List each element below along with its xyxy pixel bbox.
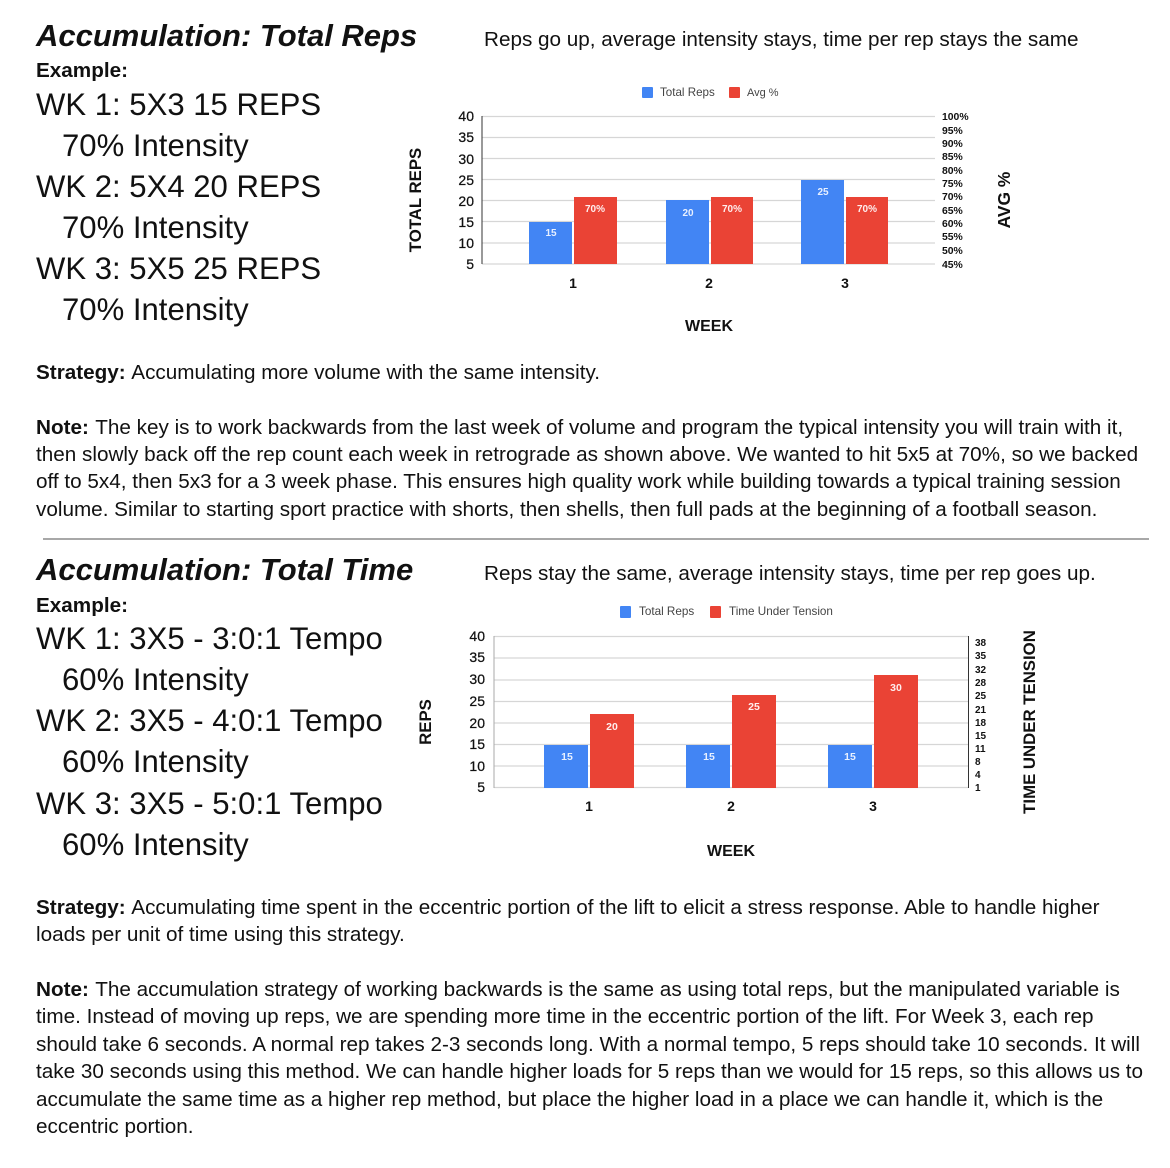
example program list: 70% Intensity — [62, 210, 249, 245]
left axis labels: 25 — [458, 172, 474, 188]
bars: 15 — [703, 751, 715, 763]
bar chart: total reps and time under tension — [416, 605, 1039, 860]
bars — [544, 675, 918, 788]
divider — [43, 538, 1149, 540]
right axis labels: 65% — [942, 206, 963, 217]
example program list: 70% Intensity — [62, 292, 249, 327]
right axis labels — [942, 112, 969, 271]
legend — [620, 605, 833, 618]
x axis labels: 1 — [585, 798, 593, 814]
note text: then slowly back off the rep count each week in retrograde as shown above. We wanted to hit 5x5 at 70%, so we backed — [36, 443, 1138, 466]
note text: should take 6 seconds. A normal rep takes 2-3 seconds long. With a normal tempo, 5 reps should take 10 seconds. It will — [36, 1033, 1140, 1056]
note text: off to 5x4, then 5x3 for a 3 week phase. This ensures high quality work while building towards a typical training session — [36, 470, 1121, 493]
title: Accumulation: Total Time — [36, 552, 413, 587]
right axis labels — [975, 638, 987, 794]
note text: accumulate the same time as a higher rep method, but place the higher load in a place we can handle it, which is the — [36, 1088, 1103, 1111]
example program list: WK 3: 3X5 - 5:0:1 Tempo — [36, 786, 383, 821]
left axis labels: 5 — [466, 256, 474, 272]
x axis labels: WEEK — [685, 318, 733, 335]
axis title: avg percent: AVG % — [994, 172, 1014, 228]
right axis labels: 4 — [975, 770, 981, 781]
right axis labels: 75% — [942, 179, 963, 190]
x axis labels: 1 — [569, 275, 577, 291]
axis title: time under tension: TIME UNDER TENSION — [1020, 630, 1039, 814]
left axis labels: 15 — [469, 736, 485, 752]
example label: Example: — [36, 594, 128, 617]
right axis labels: 100% — [942, 112, 969, 123]
x axis labels — [585, 798, 877, 860]
left axis labels: 5 — [477, 779, 485, 795]
left axis labels: 30 — [469, 671, 485, 687]
axis title: reps: REPS — [416, 699, 435, 745]
section: Accumulation Total Time — [35, 552, 1143, 1138]
chart subtitle: Reps go up, average intensity stays, time per rep stays the same — [484, 28, 1078, 51]
note text: volume. Similar to starting sport practice with shorts, then shells, then full pads at the beginning of a football season. — [36, 498, 1097, 521]
x axis labels: WEEK — [707, 843, 755, 860]
legend: Avg % — [747, 87, 779, 99]
example program list — [36, 621, 383, 862]
right axis labels: 60% — [942, 219, 963, 230]
right axis labels: 18 — [975, 718, 987, 729]
bars — [529, 180, 888, 264]
note text: eccentric portion. — [36, 1115, 194, 1138]
x axis labels: 3 — [841, 275, 849, 291]
example program list: WK 2: 5X4 20 REPS — [36, 169, 321, 204]
strategy text: loads per unit of time using this strategy. — [36, 923, 405, 946]
left axis labels: 35 — [469, 649, 485, 665]
example program list: WK 1: 3X5 - 3:0:1 Tempo — [36, 621, 383, 656]
right axis labels: 55% — [942, 232, 963, 243]
left axis labels — [469, 628, 485, 795]
right axis labels: 15 — [975, 731, 987, 742]
right axis labels: 38 — [975, 638, 987, 649]
bars: 20 — [682, 208, 694, 219]
title: Accumulation: Total Reps — [36, 18, 417, 53]
chart subtitle: Reps stay the same, average intensity stays, time per rep goes up. — [484, 562, 1096, 585]
right axis labels: 85% — [942, 152, 963, 163]
strategy text: Strategy: Accumulating time spent in the eccentric portion of the lift to elicit a stress response. Able to handle higher — [36, 896, 1100, 919]
bars: 30 — [890, 682, 902, 694]
note text: Note: The accumulation strategy of working backwards is the same as using total reps, but the manipulated variable is — [36, 978, 1120, 1001]
section: Accumulation Total Reps — [35, 18, 1138, 521]
bars: 70% — [857, 204, 877, 215]
example program list: WK 1: 5X3 15 REPS — [36, 87, 321, 122]
bar chart: total reps and average percent — [406, 86, 1014, 335]
strategy text: Strategy: Accumulating more volume with the same intensity. — [36, 361, 600, 384]
example program list: 60% Intensity — [62, 662, 249, 697]
bars: 15 — [545, 228, 557, 239]
example program list: WK 2: 3X5 - 4:0:1 Tempo — [36, 703, 383, 738]
left axis labels: 25 — [469, 693, 485, 709]
bars: 15 — [561, 751, 573, 763]
axis title: total reps: TOTAL REPS — [406, 148, 425, 252]
bars: 25 — [748, 701, 760, 713]
right axis labels: 35 — [975, 651, 987, 662]
example program list: 60% Intensity — [62, 827, 249, 862]
bars: 25 — [817, 187, 829, 198]
right axis labels: 80% — [942, 166, 963, 177]
left axis labels: 40 — [458, 108, 474, 124]
right axis labels: 95% — [942, 126, 963, 137]
left axis labels: 10 — [458, 235, 474, 251]
left axis labels: 20 — [458, 193, 474, 209]
strategy text — [36, 896, 1100, 946]
note text: take 30 seconds using this method. We can handle higher loads for 5 reps than we would for 15 reps, so this allows us to — [36, 1060, 1143, 1083]
note text — [36, 416, 1138, 521]
x axis labels — [569, 275, 849, 335]
right axis labels: 50% — [942, 246, 963, 257]
note text: Note: The key is to work backwards from the last week of volume and program the typical intensity you will train with it, — [36, 416, 1123, 439]
example program list: 60% Intensity — [62, 744, 249, 779]
left axis labels: 40 — [469, 628, 485, 644]
right axis labels: 70% — [942, 192, 963, 203]
left axis labels: 10 — [469, 758, 485, 774]
left axis labels: 30 — [458, 151, 474, 167]
x axis labels: 3 — [869, 798, 877, 814]
left axis labels: 15 — [458, 214, 474, 230]
legend: Total Reps — [639, 605, 694, 618]
x axis labels: 2 — [727, 798, 735, 814]
bars: 70% — [722, 204, 742, 215]
right axis labels: 90% — [942, 139, 963, 150]
legend: Time Under Tension — [729, 605, 833, 618]
example program list: 70% Intensity — [62, 128, 249, 163]
x axis labels: 2 — [705, 275, 713, 291]
left axis labels: 20 — [469, 715, 485, 731]
right axis labels: 1 — [975, 783, 981, 794]
note text: time. Instead of moving up reps, we are spending more time in the eccentric portion of the lift. For Week 3, each rep — [36, 1005, 1094, 1028]
bars: 15 — [844, 751, 856, 763]
right axis labels: 21 — [975, 705, 987, 716]
left axis labels — [458, 108, 474, 272]
example label: Example: — [36, 59, 128, 82]
right axis labels: 11 — [975, 744, 986, 755]
legend: Total Reps — [660, 86, 715, 99]
note text — [36, 978, 1143, 1138]
legend — [642, 86, 779, 99]
right axis labels: 28 — [975, 678, 987, 689]
bars: 20 — [606, 721, 618, 733]
left axis labels: 35 — [458, 129, 474, 145]
example program list — [36, 87, 321, 327]
right axis labels: 45% — [942, 260, 963, 271]
right axis labels: 8 — [975, 757, 981, 768]
right axis labels: 32 — [975, 665, 987, 676]
bars: 70% — [585, 204, 605, 215]
example program list: WK 3: 5X5 25 REPS — [36, 251, 321, 286]
right axis labels: 25 — [975, 691, 987, 702]
